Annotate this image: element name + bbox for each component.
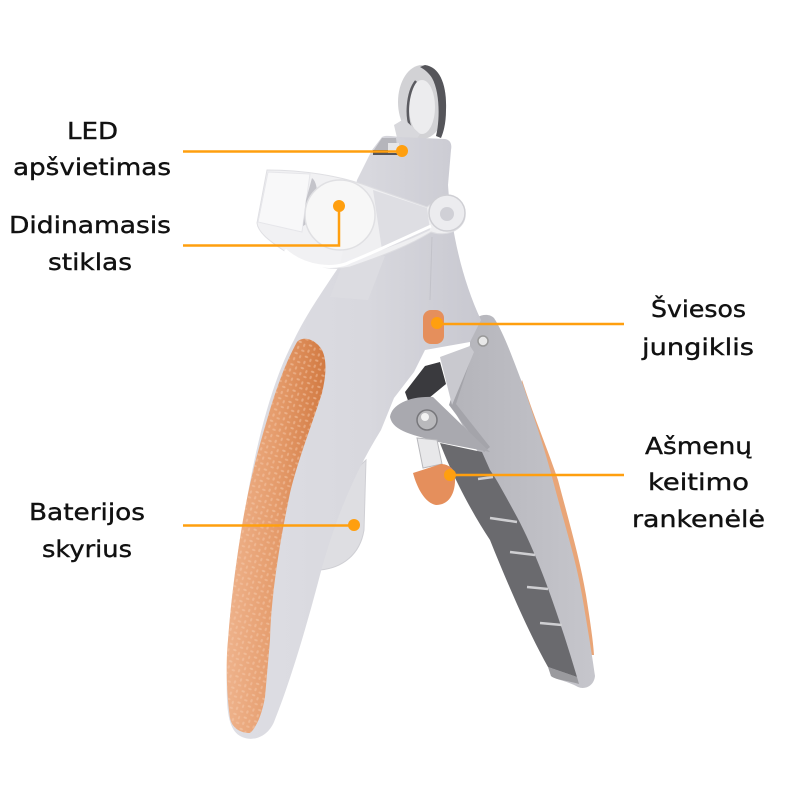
callout: Didinamasis stiklas [9, 200, 345, 276]
callout: Ašmenų keitimo rankenėlė [444, 432, 765, 533]
orange stripe on lever back [520, 380, 594, 655]
main body [227, 136, 481, 739]
window panel [330, 256, 385, 300]
LED lamp [373, 138, 399, 155]
battery compartment [320, 460, 366, 570]
callout: Baterijos skyrius: Baterijos [29, 498, 145, 526]
callout: Šviesos jungiklis: Šviesos [651, 295, 746, 323]
blade replacement handle [413, 464, 455, 505]
light switch [423, 310, 444, 344]
callout: Baterijos skyrius: skyrius [42, 535, 132, 563]
callout: Baterijos skyrius [29, 498, 360, 563]
callout: Šviesos jungiklis: jungiklis [641, 333, 754, 361]
callout: Didinamasis stiklas: stiklas [48, 248, 132, 276]
callout: LED apšvietimas: LED [67, 117, 118, 145]
callout: Ašmenų keitimo rankenėlė: keitimo [648, 468, 749, 496]
grooved dark interior [440, 443, 577, 677]
callout: LED apšvietimas [13, 117, 408, 181]
callout: Ašmenų keitimo rankenėlė: rankenėlė [632, 505, 765, 533]
magnifying lens [257, 170, 465, 268]
orange grip [227, 339, 325, 733]
callout: Ašmenų keitimo rankenėlė: Ašmenų [645, 432, 752, 460]
lever handle [440, 315, 595, 688]
pivot and blade [390, 346, 490, 468]
callout: Šviesos jungiklis [431, 295, 754, 361]
callout: Didinamasis stiklas: Didinamasis [9, 211, 171, 239]
hanging ring [394, 65, 446, 146]
illustration: nail clipper [227, 65, 595, 739]
callout: LED apšvietimas: apšvietimas [13, 153, 171, 181]
